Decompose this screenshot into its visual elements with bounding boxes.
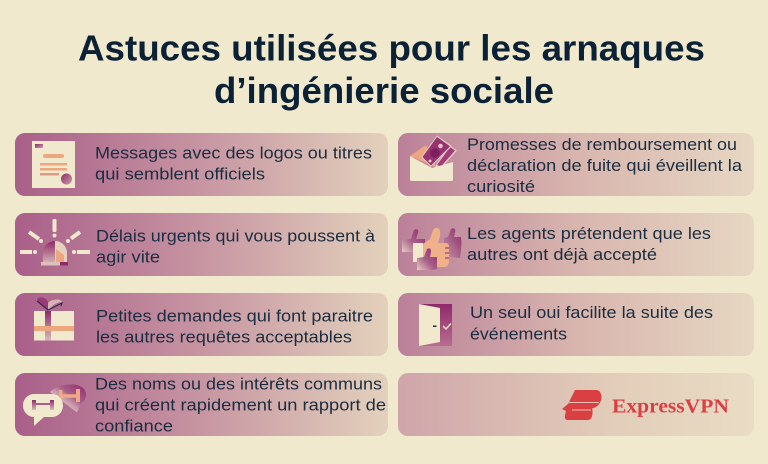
text: one yes [470,303,713,344]
text: common interests: confiance [95,416,173,436]
panel: refund promises [398,133,754,196]
icon: open door with check [419,304,452,346]
text: others accepted: Les agents prétendent que les [467,224,711,243]
icon: thumbs up [402,228,461,270]
panel: one yes [398,293,754,356]
text: official messages [95,144,372,184]
text: urgent deadlines: agir vite [96,248,160,266]
text: small requests: Petites demandes qui font paraitre [96,306,373,326]
icon: gift box [34,297,74,340]
title: Astuces utilisées pour les arnaques [78,28,705,68]
text: small requests: les autres requêtes acceptables [96,328,352,346]
title: d’ingénierie sociale [214,70,554,111]
panel: small requests [15,293,388,356]
text: common interests: qui créent rapidement un rapport de [95,396,386,414]
icon: envelope with money [410,136,457,181]
panel: urgent deadlines [15,213,388,276]
icon: ExpressVPN mark [562,390,602,420]
icon: bottom small thumb [417,248,437,270]
text: refund promises [467,135,743,196]
text: one yes: événements [470,324,567,344]
panel: logo [398,373,754,436]
title [78,28,705,111]
text: others accepted [467,224,711,264]
panel: common interests [15,373,388,436]
icon: central thumb [423,228,449,267]
panel: others accepted [398,213,754,276]
text: refund promises: déclaration de fuite qui éveillent la [467,156,743,175]
text: urgent deadlines [96,226,376,266]
text: urgent deadlines: Délais urgents qui vous poussent à [96,226,376,246]
text: one yes: Un seul oui facilite la suite des [470,303,713,322]
text: refund promises: curiosité [467,177,535,196]
text: common interests: Des noms ou des intérêts communs [95,374,382,394]
text: official messages: Messages avec des logos ou titres [95,144,372,162]
icon: right small thumb [444,228,461,258]
text: refund promises: Promesses de remboursement ou [467,135,737,154]
icon: left small thumb [402,229,425,252]
text: official messages: qui semblent officiels [95,164,265,184]
logo: ExpressVPN: ExpressVPN [612,396,730,418]
text: common interests [95,374,386,436]
icon: speech bubbles with dumbbells [23,384,86,426]
text: small requests [96,306,373,346]
icon: official document [32,141,75,188]
icon: alarm light [20,219,90,266]
icon: cream cuff [413,243,423,262]
text: others accepted: autres ont déjà accepté [467,245,657,264]
logo: ExpressVPN [562,390,730,420]
panel: official messages [15,133,388,196]
